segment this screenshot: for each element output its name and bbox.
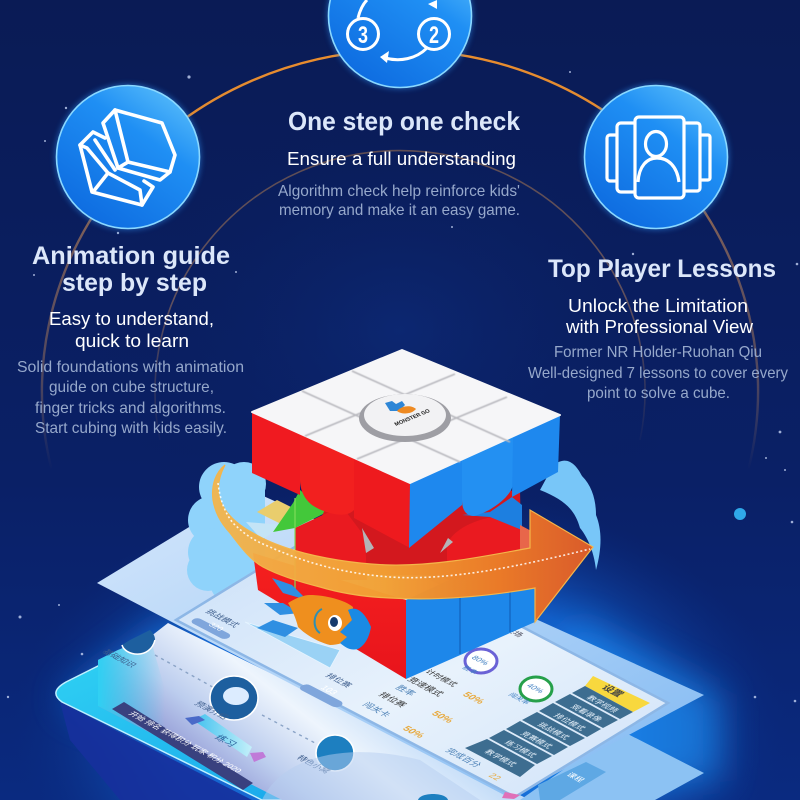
text block: top player lessons: Unlock the Limitation xyxy=(568,296,748,316)
icon circle: top player lessons xyxy=(583,84,729,230)
lesson node 3: 特色小窝 xyxy=(294,754,333,775)
panel layer: upper light panel xyxy=(97,490,704,798)
text block: animation guide: Start cubing with kids easily. xyxy=(35,420,227,437)
text block: animation guide: step by step xyxy=(62,269,207,297)
cube lower layer xyxy=(253,540,535,679)
text block: one step one check: One step one check xyxy=(288,106,520,136)
game stats: 计时模式 xyxy=(423,668,460,688)
tablet base panel xyxy=(56,660,370,800)
ranking label: 排位赛 xyxy=(323,672,355,689)
cube center logo: MONSTER GO xyxy=(394,408,432,428)
game stats: 胜场 xyxy=(503,626,526,638)
text block: one step one check: memory and make it an easy game. xyxy=(279,202,520,219)
cube top layer red xyxy=(252,412,410,548)
text block: animation guide: Solid foundations with animation xyxy=(17,359,244,376)
menu buttons: 竞赛模式 xyxy=(518,730,555,750)
menu buttons: 教学视频 xyxy=(584,694,621,714)
game stats: 50% xyxy=(459,691,487,706)
game stats: 闯关卡 xyxy=(360,700,394,719)
stars xyxy=(7,71,798,702)
cube center logo xyxy=(364,394,446,436)
text block: top player lessons: Top Player Lessons xyxy=(548,255,776,283)
text block: animation guide xyxy=(17,242,244,437)
text block: top player lessons: point to solve a cube. xyxy=(587,385,730,402)
lesson node 2 xyxy=(192,676,258,721)
lesson node 1 xyxy=(100,630,155,669)
menu buttons xyxy=(465,686,633,777)
game stats: 胜率 xyxy=(393,683,419,697)
game stats: 竞速模式 xyxy=(405,675,447,698)
panel: game mode screen xyxy=(176,526,668,799)
icon: small floating globe xyxy=(734,508,746,520)
lesson node 2: 预演介绍 xyxy=(192,700,231,721)
right cloud wisp xyxy=(540,461,600,570)
game stats: 50% xyxy=(399,725,427,740)
left cloud xyxy=(187,462,280,618)
icon circle: step check cycle xyxy=(327,0,473,89)
text block: animation guide: finger tricks and algorithms. xyxy=(35,400,226,417)
progress ring green: 闯关率 xyxy=(506,691,533,706)
menu buttons: 教学模式 xyxy=(482,748,519,768)
progress ring purple xyxy=(460,649,497,676)
tablet practice button xyxy=(185,714,266,762)
game stats xyxy=(360,626,526,782)
cube white top face xyxy=(252,350,560,483)
progress ring green xyxy=(506,677,552,706)
menu buttons: 练习模式 xyxy=(502,739,539,759)
cube top layer blue xyxy=(409,415,560,548)
progress ring purple: 胜率 xyxy=(460,664,480,676)
game stats: 50% xyxy=(428,710,456,725)
game stats: 完成百分 xyxy=(443,746,485,769)
icon circle: step check cycle: 3 xyxy=(358,22,368,49)
orange orbit arcs xyxy=(42,50,758,470)
cube xyxy=(246,350,560,679)
ranking label: 103 xyxy=(318,684,340,696)
settings yellow tab: 设置 xyxy=(598,683,627,699)
text block: top player lessons: Former NR Holder-Ruohan Qiu xyxy=(554,344,762,361)
text block: top player lessons: Well-designed 7 lessons to cover every xyxy=(528,365,788,382)
menu buttons: 观看录像 xyxy=(568,703,605,723)
challenge mode label xyxy=(189,608,242,640)
text block: animation guide: quick to learn xyxy=(75,331,189,351)
game stats: 排位赛 xyxy=(376,690,410,709)
text block: one step one check: Algorithm check help reinforce kids' xyxy=(278,183,520,200)
progress ring green: 40% xyxy=(524,682,546,694)
panel layer: lessons map xyxy=(98,623,704,800)
menu buttons: 排位模式 xyxy=(551,712,588,732)
text block: top player lessons: with Professional View xyxy=(565,317,754,337)
icon circle: step check cycle: 2 xyxy=(429,22,439,49)
cube middle layer xyxy=(246,490,535,590)
menu buttons: 挑战模式 xyxy=(535,721,572,741)
text block: animation guide: Animation guide xyxy=(32,242,230,270)
fish mascot xyxy=(257,578,371,650)
lesson node 1: 基础知识 xyxy=(100,648,139,669)
text block: top player lessons xyxy=(528,255,788,402)
text block: one step one check xyxy=(278,106,520,219)
tablet notice bar: 开始 排名 获得积分 玩家 积分 2020 xyxy=(126,710,245,774)
progress ring purple: 80% xyxy=(469,654,491,666)
panel layer: lessons map: 课程 xyxy=(564,771,586,783)
text block: animation guide: guide on cube structure, xyxy=(49,379,214,396)
challenge mode label: 320 xyxy=(206,621,226,632)
icon circle: rotating cube animation guide xyxy=(55,84,201,230)
lesson node 3 xyxy=(294,735,354,775)
text block: animation guide: Easy to understand, xyxy=(49,309,214,329)
game stats: 22 xyxy=(486,772,504,782)
text block: one step one check: Ensure a full understanding xyxy=(287,149,516,169)
challenge mode label: 挑战模式 xyxy=(203,608,242,629)
tablet practice button: 练习 xyxy=(211,733,240,749)
ranking label xyxy=(298,672,355,709)
settings yellow tab xyxy=(585,676,650,712)
orange rotation arrow xyxy=(213,465,593,622)
tablet notice bar xyxy=(112,702,253,790)
